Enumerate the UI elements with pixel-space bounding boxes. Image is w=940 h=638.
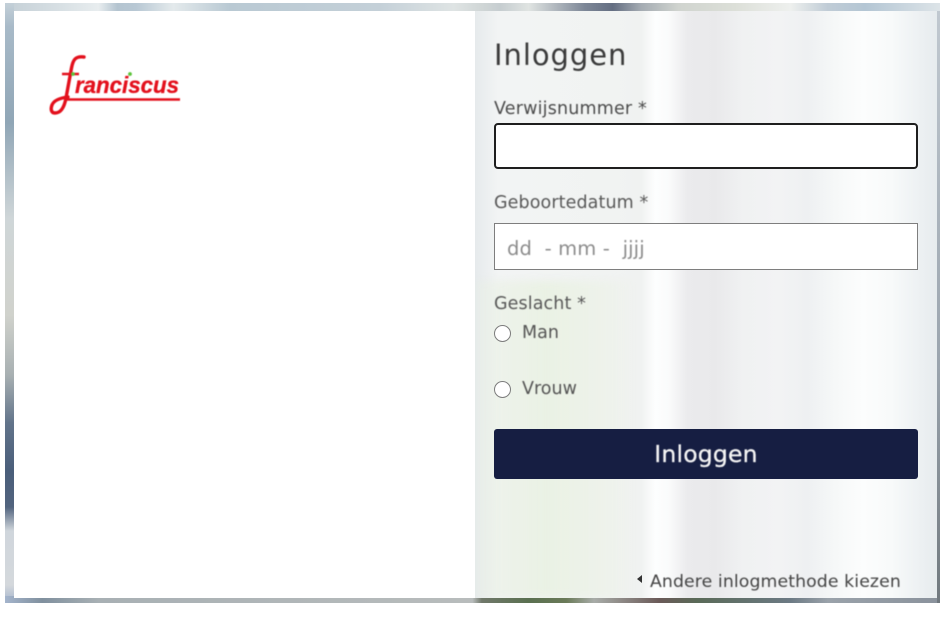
logo: franciscus <box>48 54 181 116</box>
frame: top edge <box>5 3 940 11</box>
button label: Inloggen <box>654 440 758 468</box>
radio label: Vrouw <box>522 379 577 399</box>
input: Geboortedatum <box>494 223 918 270</box>
link text: Andere inlogmethode kiezen <box>650 572 901 592</box>
radio circle <box>494 325 511 342</box>
input: Verwijsnummer <box>494 123 918 169</box>
label: Geslacht: Geslacht * <box>494 294 586 314</box>
placeholder: dd - mm - jjjj <box>507 237 645 260</box>
background tint: green foliage <box>475 281 635 598</box>
panel: logo side <box>14 11 475 598</box>
button: Inloggen <box>494 429 918 479</box>
frame: left edge <box>5 3 14 603</box>
frame: bottom edge <box>5 596 940 603</box>
link: Andere inlogmethode kiezen <box>637 572 901 592</box>
radio circle <box>494 381 511 398</box>
panel: login form <box>475 11 937 598</box>
logo: franciscus: ranciscus <box>75 72 179 98</box>
radio: Vrouw <box>494 379 577 399</box>
label: Verwijsnummer: Verwijsnummer * <box>494 99 647 119</box>
radio label: Man <box>522 323 559 343</box>
heading: Inloggen <box>494 38 627 72</box>
label: Geboortedatum: Geboortedatum * <box>494 193 648 213</box>
radio: Man <box>494 323 559 343</box>
frame: right edge <box>937 11 940 603</box>
arrow icon <box>637 575 642 583</box>
